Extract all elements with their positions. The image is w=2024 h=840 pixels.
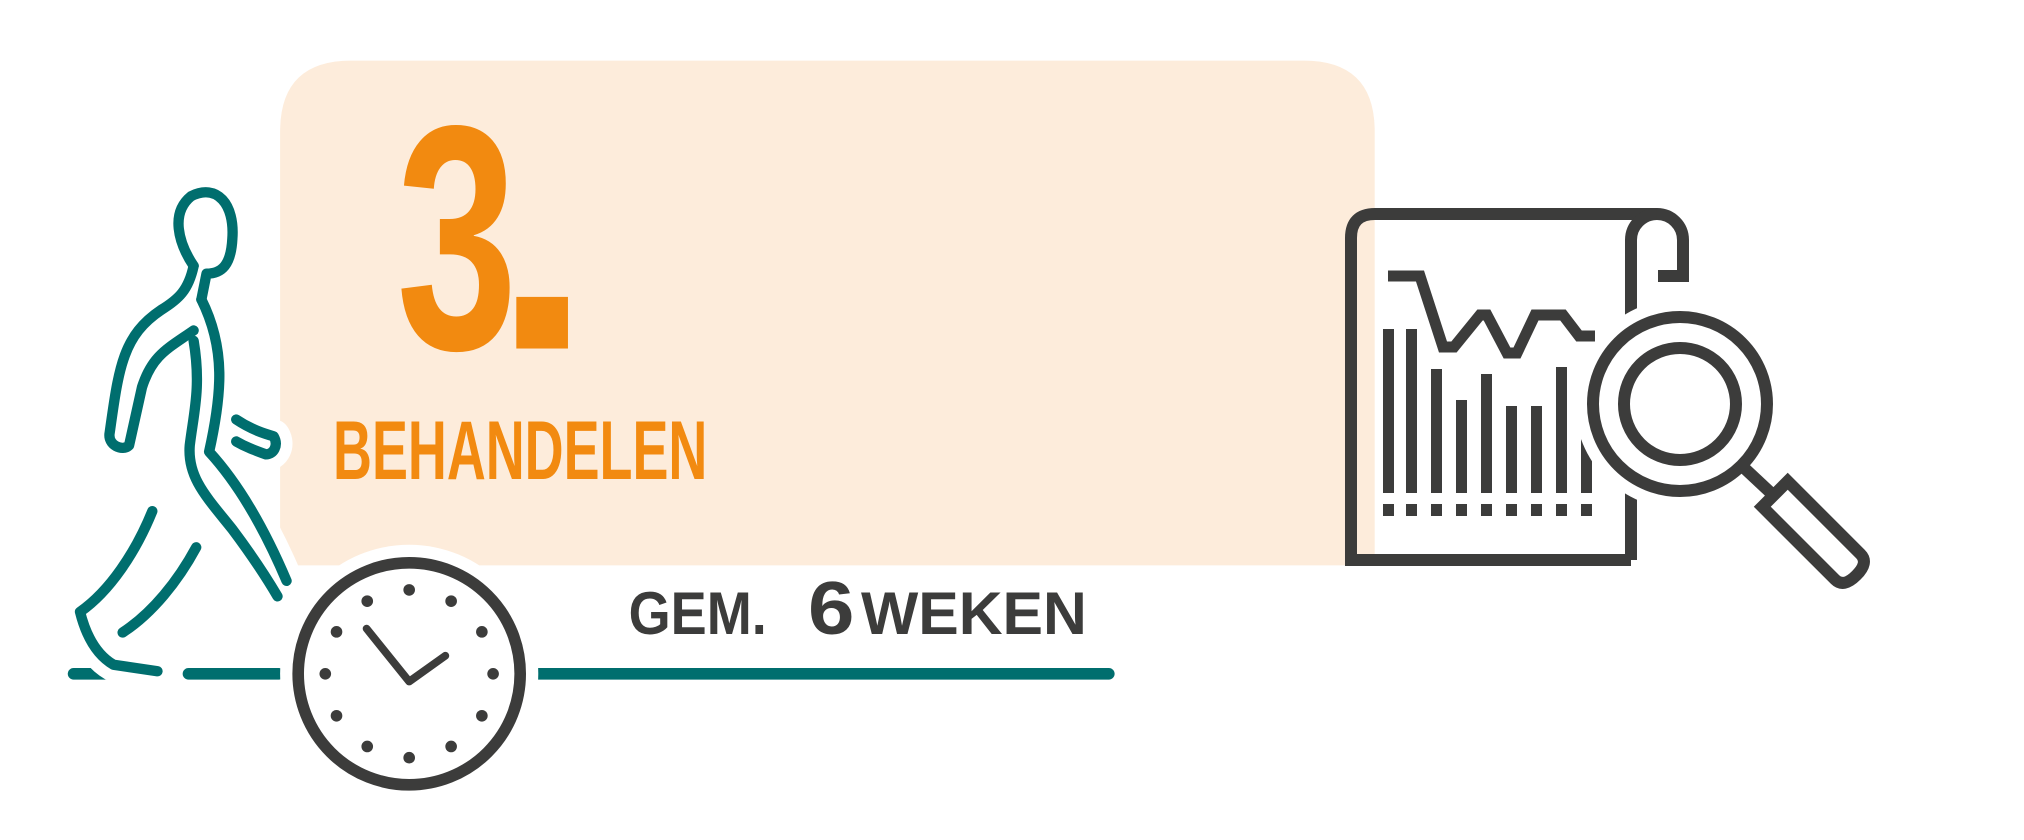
text: duration: 6 [808, 566, 855, 650]
line chart [1388, 276, 1595, 353]
text: duration: GEM. [629, 579, 767, 647]
magnifier [1575, 299, 1785, 509]
text: duration: WEKEN [861, 579, 1087, 647]
icon: walking person [80, 192, 287, 671]
bar chart [1383, 329, 1592, 516]
heading: step number: 3 [396, 60, 517, 418]
icon: report with magnifier [1351, 214, 1869, 588]
text: duration [629, 566, 1087, 650]
icon: clock [280, 545, 538, 803]
panel: peach background [280, 61, 1375, 565]
heading: BEHANDELEN: BEHANDELEN [333, 403, 707, 497]
timeline line [74, 669, 1109, 678]
document [1351, 214, 1683, 560]
